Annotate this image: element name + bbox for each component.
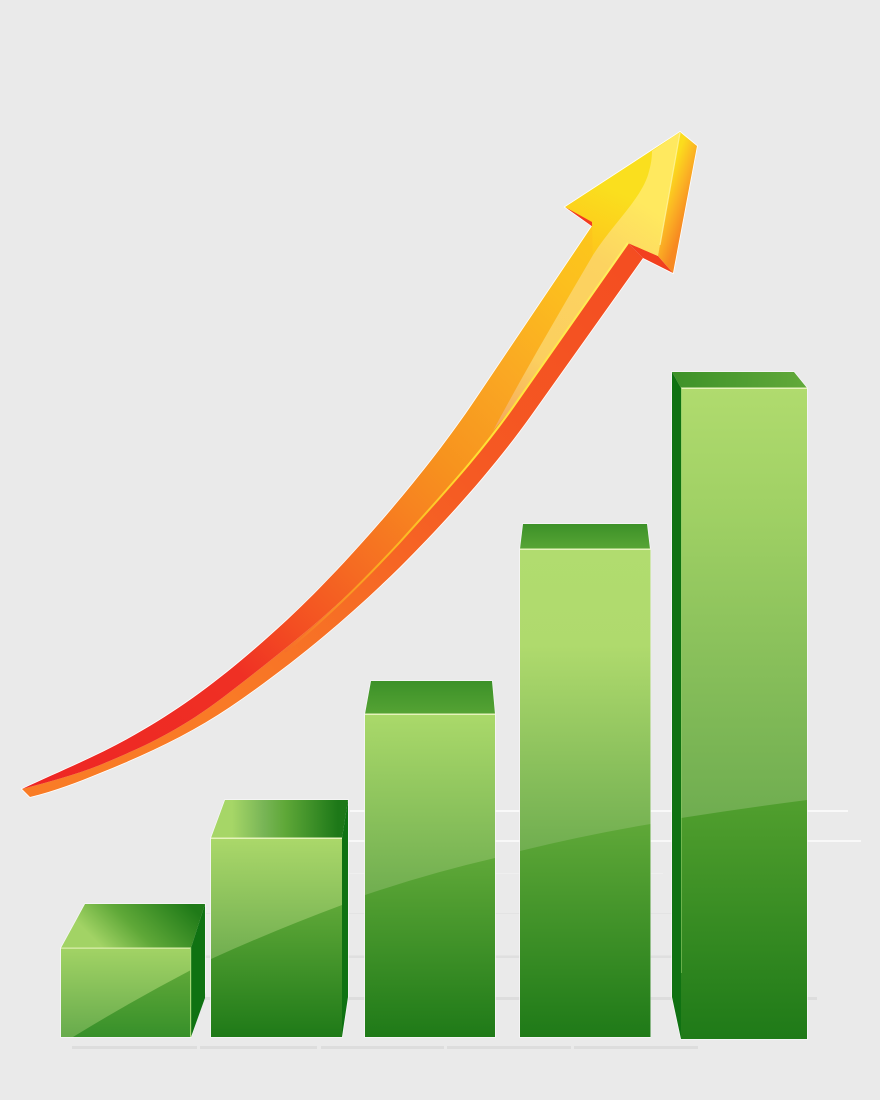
background gridlines bbox=[72, 810, 861, 1049]
arrow ribbon yellow edge bbox=[285, 243, 628, 652]
arrowhead shadow left bbox=[565, 207, 593, 227]
arrowhead shadow right bbox=[628, 243, 673, 273]
bar 3 bbox=[365, 681, 495, 1037]
rising arrow bbox=[22, 132, 697, 797]
arrow highlight bbox=[493, 132, 680, 431]
arrow top ribbon bbox=[22, 215, 628, 789]
bar 4 bbox=[520, 524, 650, 1037]
arrowhead ridge line bbox=[660, 133, 680, 245]
bar 1 bbox=[61, 904, 205, 1037]
arrow underside ribbon bbox=[22, 243, 643, 797]
bar 5 bbox=[672, 372, 807, 1039]
arrow outline bbox=[22, 132, 697, 797]
bar 2 bbox=[211, 800, 348, 1037]
arrowhead front face bbox=[565, 132, 680, 262]
arrowhead right bevel bbox=[658, 132, 697, 273]
